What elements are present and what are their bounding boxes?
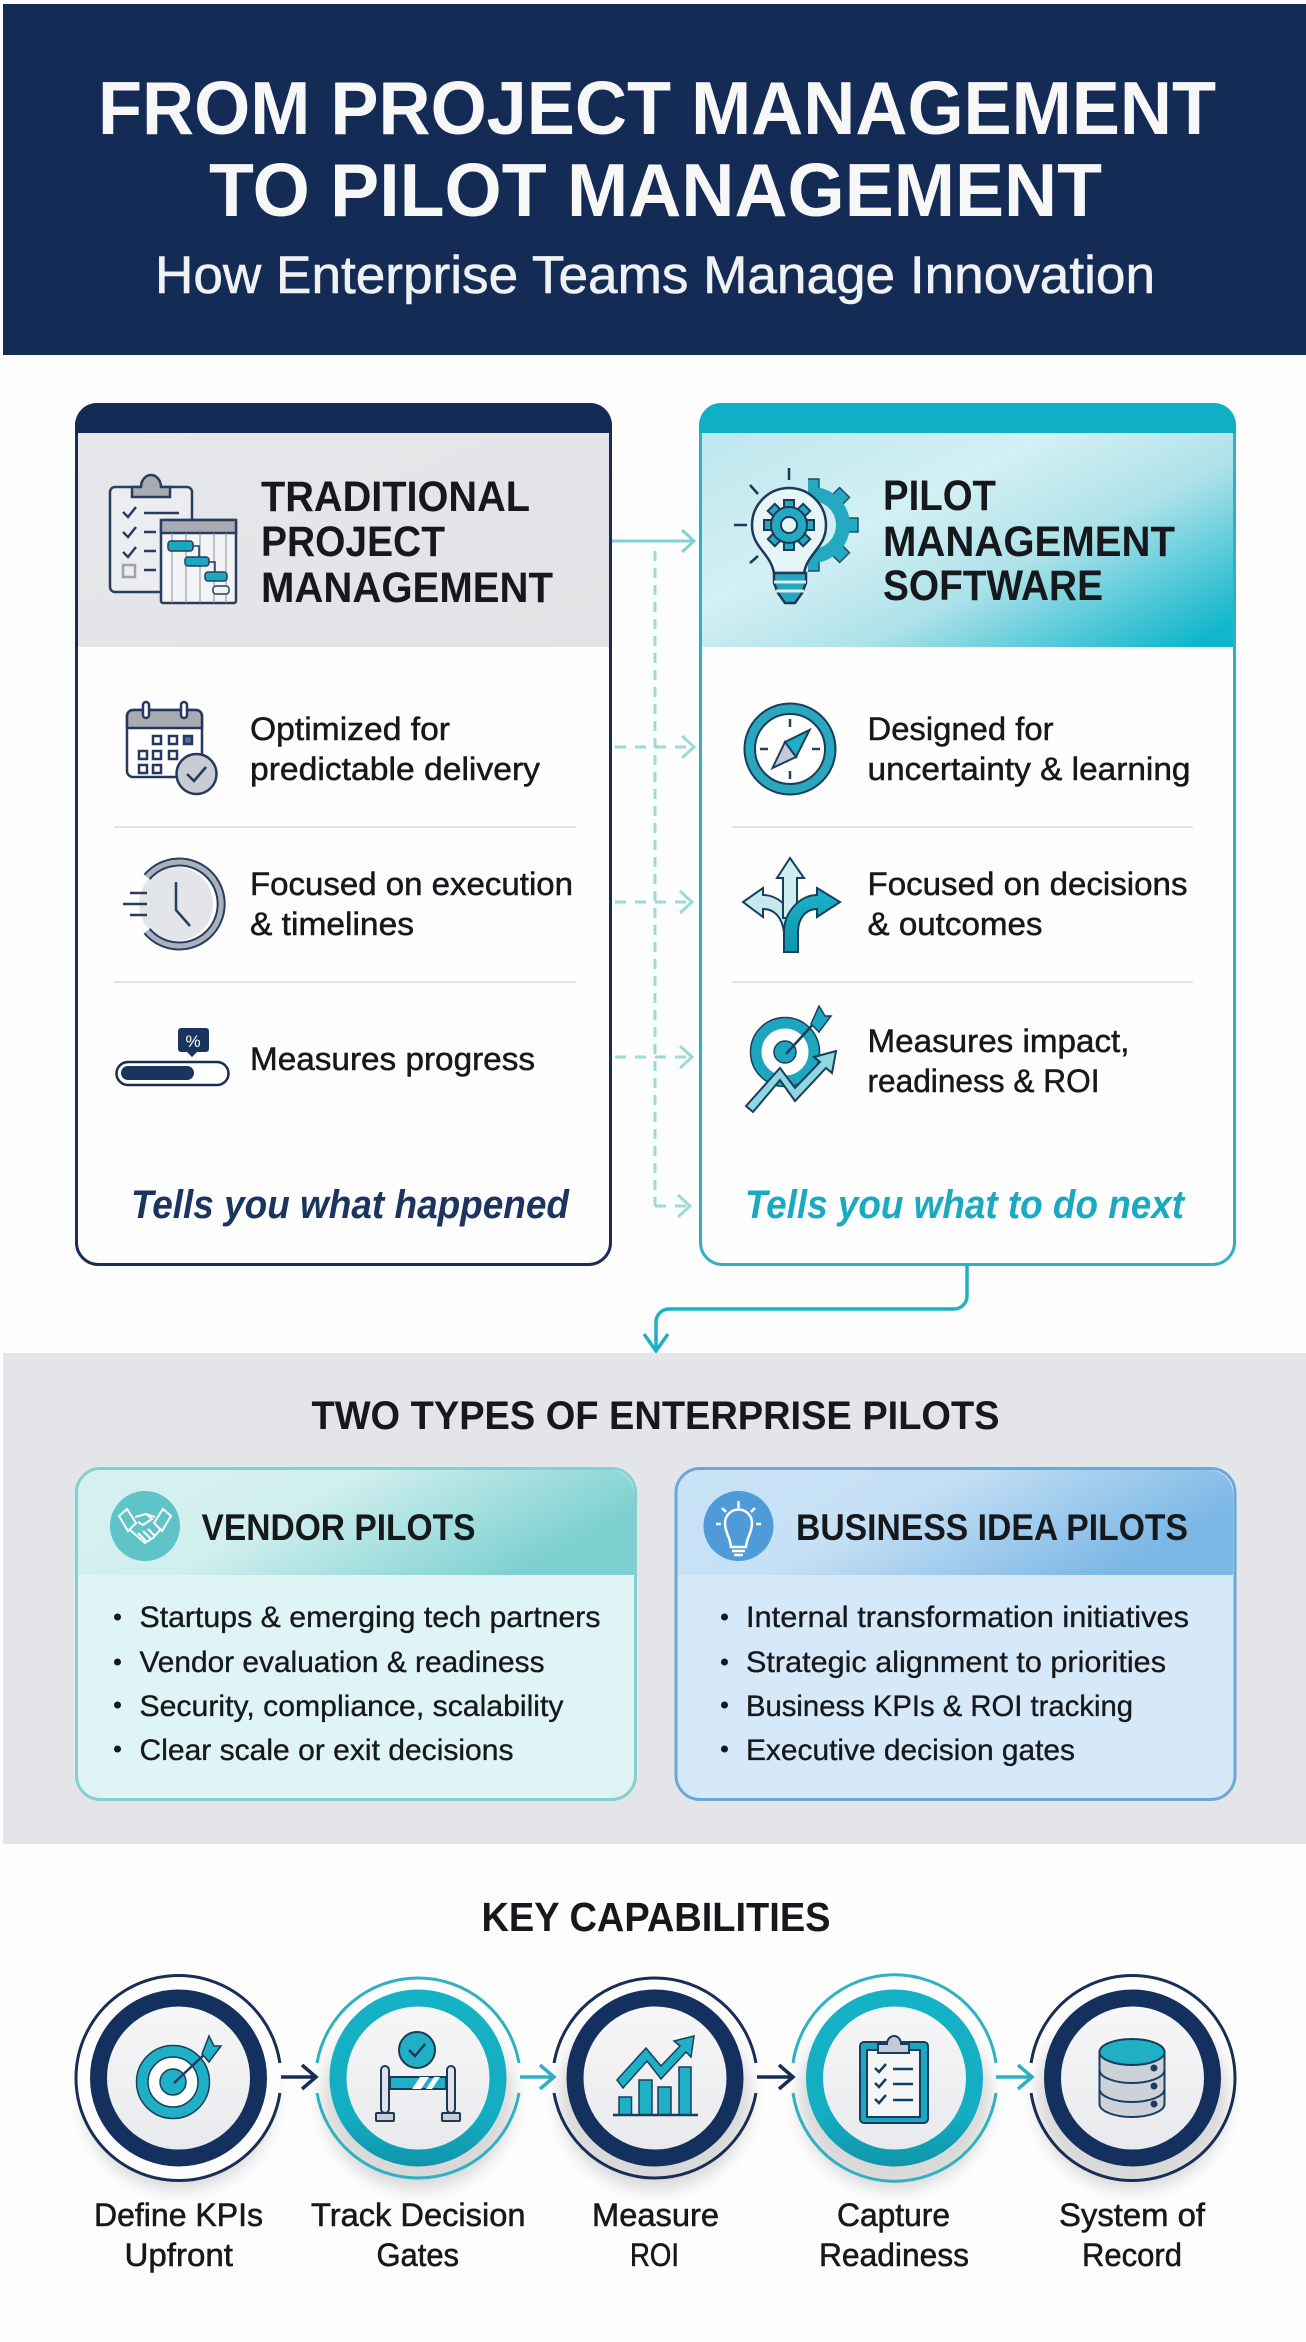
label: Define KPIs bbox=[94, 2197, 263, 2233]
panel: business idea pilots bbox=[676, 1468, 1235, 1800]
label: Upfront bbox=[124, 2237, 233, 2273]
text: designed for uncertainty and learning bbox=[868, 711, 1190, 787]
title: FROM PROJECT MANAGEMENT bbox=[98, 66, 1216, 150]
section: key capabilities bbox=[76, 1894, 1235, 2273]
bullet list: Executive decision gates bbox=[746, 1734, 1075, 1767]
icon: calendar bbox=[127, 702, 216, 794]
text: measures impact, readiness and ROI: readiness & ROI bbox=[868, 1063, 1100, 1099]
icon: handshake bbox=[110, 1491, 180, 1561]
icon: light bulb with gear bbox=[734, 468, 858, 603]
label bbox=[592, 2197, 719, 2273]
label: Gates bbox=[376, 2237, 459, 2273]
panel: vendor pilots bbox=[76, 1468, 636, 1800]
label: System of bbox=[1059, 2197, 1205, 2233]
text: focused on execution and timelines: & timelines bbox=[250, 906, 414, 942]
bullet list: Internal transformation initiatives bbox=[746, 1601, 1189, 1634]
heading: BUSINESS IDEA PILOTS bbox=[796, 1507, 1188, 1548]
header banner bbox=[3, 4, 1306, 355]
label: Measure bbox=[592, 2197, 719, 2233]
icon: clipboard and gantt chart bbox=[110, 475, 236, 603]
bullet list: Startups & emerging tech partners bbox=[140, 1601, 600, 1634]
label bbox=[311, 2197, 526, 2273]
bullet list: Vendor evaluation & readiness bbox=[140, 1646, 544, 1679]
arrow bbox=[996, 2065, 1032, 2089]
bullet list: Security, compliance, scalability bbox=[140, 1690, 564, 1723]
heading: MANAGEMENT bbox=[883, 518, 1175, 566]
bullet list: Strategic alignment to priorities bbox=[746, 1646, 1166, 1679]
label: Readiness bbox=[819, 2237, 969, 2273]
text: focused on decisions and outcomes bbox=[868, 866, 1188, 942]
icon: rising bar chart bbox=[613, 2036, 698, 2115]
capability: define KPIs upfront bbox=[76, 1976, 281, 2273]
icon: progress bar: % bbox=[185, 1032, 201, 1051]
bullet list bbox=[114, 1601, 600, 1767]
icon: progress bar bbox=[116, 1028, 228, 1085]
heading: VENDOR PILOTS bbox=[202, 1507, 476, 1548]
heading bbox=[883, 472, 1175, 610]
subtitle: How Enterprise Teams Manage Innovation bbox=[155, 246, 1155, 305]
label bbox=[94, 2197, 263, 2273]
text: optimized for predictable delivery: Optimized for bbox=[250, 711, 450, 747]
icon: branching arrows bbox=[743, 858, 840, 952]
heading: PROJECT bbox=[261, 518, 445, 566]
icon: clock bbox=[123, 862, 221, 946]
arrow: down to pilot types bbox=[644, 1265, 967, 1351]
bullet list bbox=[721, 1601, 1189, 1767]
capability: system of record bbox=[1031, 1976, 1235, 2273]
text: focused on decisions and outcomes: & outcomes bbox=[868, 906, 1042, 942]
icon: target bbox=[136, 2036, 221, 2118]
text: focused on decisions and outcomes: Focused on decisions bbox=[868, 866, 1188, 902]
label bbox=[819, 2197, 969, 2273]
bullet list: Clear scale or exit decisions bbox=[140, 1734, 514, 1767]
icon: database bbox=[1100, 2039, 1164, 2117]
heading bbox=[261, 473, 553, 612]
heading: SOFTWARE bbox=[883, 562, 1103, 610]
arrow bbox=[520, 2065, 554, 2089]
text: designed for uncertainty and learning: uncertainty & learning bbox=[868, 751, 1190, 787]
text: optimized for predictable delivery: predictable delivery bbox=[250, 751, 540, 787]
heading: TWO TYPES OF ENTERPRISE PILOTS bbox=[312, 1394, 1000, 1438]
label: Track Decision bbox=[311, 2197, 526, 2233]
label: Capture bbox=[837, 2197, 950, 2233]
icon: checklist clipboard bbox=[860, 2036, 928, 2123]
text: measures impact, readiness and ROI bbox=[868, 1023, 1130, 1099]
icon: light bulb bbox=[704, 1491, 774, 1561]
capability: capture readiness bbox=[793, 1975, 996, 2273]
capability: track decision gates bbox=[311, 1978, 526, 2273]
icon: decision gate bbox=[376, 2032, 460, 2121]
label: Record bbox=[1082, 2237, 1182, 2273]
text: designed for uncertainty and learning: Designed for bbox=[868, 711, 1054, 747]
bullet list: Business KPIs & ROI tracking bbox=[746, 1690, 1133, 1723]
title bbox=[98, 66, 1216, 232]
heading: MANAGEMENT bbox=[261, 564, 553, 612]
heading: KEY CAPABILITIES bbox=[482, 1894, 830, 1940]
heading: PILOT bbox=[883, 472, 996, 520]
text: focused on execution and timelines bbox=[250, 866, 573, 942]
panel: traditional project management bbox=[75, 403, 612, 1264]
text: focused on execution and timelines: Focused on execution bbox=[250, 866, 573, 902]
icon: target with growth arrow bbox=[746, 1006, 836, 1112]
callout: tells you what to do next: Tells you what to do next bbox=[745, 1183, 1186, 1227]
arrow bbox=[757, 2065, 793, 2089]
heading: TRADITIONAL bbox=[261, 473, 530, 521]
arrows: comparison connectors bbox=[612, 530, 694, 1217]
capability: measure ROI bbox=[554, 1978, 756, 2273]
text: measures impact, readiness and ROI: Measures impact, bbox=[868, 1023, 1130, 1059]
section: two types of enterprise pilots bbox=[3, 1353, 1306, 1844]
title: TO PILOT MANAGEMENT bbox=[209, 148, 1102, 232]
text: optimized for predictable delivery bbox=[250, 711, 540, 787]
panel: pilot management software bbox=[699, 403, 1236, 1264]
label: ROI bbox=[630, 2237, 679, 2273]
icon: compass bbox=[744, 704, 836, 794]
text: measures progress: Measures progress bbox=[250, 1041, 535, 1077]
callout: tells you what happened: Tells you what happened bbox=[131, 1183, 570, 1227]
arrow bbox=[281, 2065, 316, 2089]
label bbox=[1059, 2197, 1205, 2273]
